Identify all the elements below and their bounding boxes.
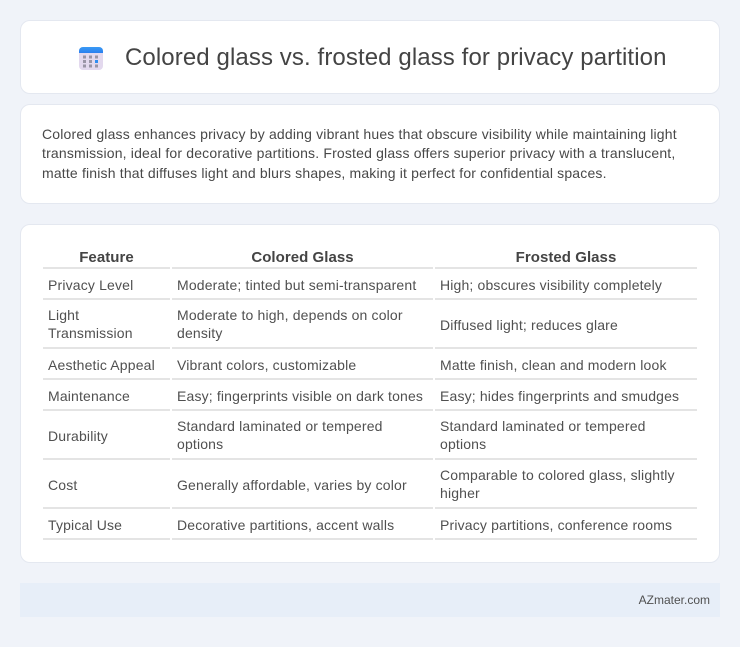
row: aesthetic appeal: Aesthetic Appeal bbox=[48, 357, 155, 373]
row: durability bbox=[48, 418, 646, 452]
row: light transmission: Moderate to high, depends on color bbox=[177, 307, 403, 323]
row: maintenance: Easy; hides fingerprints and smudges bbox=[440, 388, 679, 404]
row: durability: Durability bbox=[48, 428, 108, 444]
row: cost bbox=[48, 467, 675, 501]
row: durability: Standard laminated or tempered bbox=[177, 418, 383, 434]
row: aesthetic appeal bbox=[48, 357, 667, 373]
icon: calendar bbox=[79, 47, 103, 70]
summary text: matte finish that diffuses light and blurs shapes, making it perfect for confidential spaces. bbox=[42, 165, 607, 181]
summary text: Colored glass enhances privacy by adding vibrant hues that obscure visibility while maintaining light bbox=[42, 126, 677, 142]
panel: comparison table card bbox=[20, 224, 720, 563]
row: cost: higher bbox=[440, 485, 480, 501]
title: Colored glass vs. frosted glass for privacy partition bbox=[125, 44, 667, 71]
row: privacy level: Privacy Level bbox=[48, 277, 133, 293]
row: typical use: Privacy partitions, conference rooms bbox=[440, 517, 672, 533]
row: durability: Standard laminated or tempered bbox=[440, 418, 646, 434]
row: light transmission: Diffused light; reduces glare bbox=[440, 317, 618, 333]
header row: Frosted Glass bbox=[516, 249, 616, 266]
summary text bbox=[42, 126, 677, 181]
summary text: transmission, ideal for decorative partitions. Frosted glass offers superior privacy with a translucent, bbox=[42, 145, 675, 161]
row: cost: Cost bbox=[48, 477, 77, 493]
row: light transmission bbox=[48, 307, 618, 341]
row: aesthetic appeal: Vibrant colors, customizable bbox=[177, 357, 356, 373]
row: maintenance: Easy; fingerprints visible on dark tones bbox=[177, 388, 423, 404]
row: typical use: Typical Use bbox=[48, 517, 122, 533]
row: privacy level: High; obscures visibility completely bbox=[440, 277, 662, 293]
header row bbox=[79, 249, 616, 266]
header row: Feature bbox=[79, 249, 134, 266]
row: light transmission: Light bbox=[48, 307, 79, 323]
row: typical use: Decorative partitions, accent walls bbox=[177, 517, 394, 533]
row: cost: Generally affordable, varies by color bbox=[177, 477, 407, 493]
row: cost: Comparable to colored glass, slightly bbox=[440, 467, 675, 483]
row: maintenance bbox=[48, 388, 679, 404]
row: light transmission: Transmission bbox=[48, 325, 133, 341]
row: privacy level bbox=[48, 277, 662, 293]
footer credit: AZmater.com bbox=[639, 593, 710, 607]
row: aesthetic appeal: Matte finish, clean and modern look bbox=[440, 357, 667, 373]
header row: Colored Glass bbox=[251, 249, 354, 266]
row: durability: options bbox=[440, 436, 486, 452]
footer bar bbox=[20, 583, 720, 617]
row: durability: options bbox=[177, 436, 223, 452]
comparison table bbox=[43, 249, 697, 540]
panel: summary card bbox=[20, 104, 720, 204]
row: maintenance: Maintenance bbox=[48, 388, 130, 404]
row: privacy level: Moderate; tinted but semi-transparent bbox=[177, 277, 416, 293]
panel: title card bbox=[20, 20, 720, 94]
row: light transmission: density bbox=[177, 325, 222, 341]
row: typical use bbox=[48, 517, 672, 533]
